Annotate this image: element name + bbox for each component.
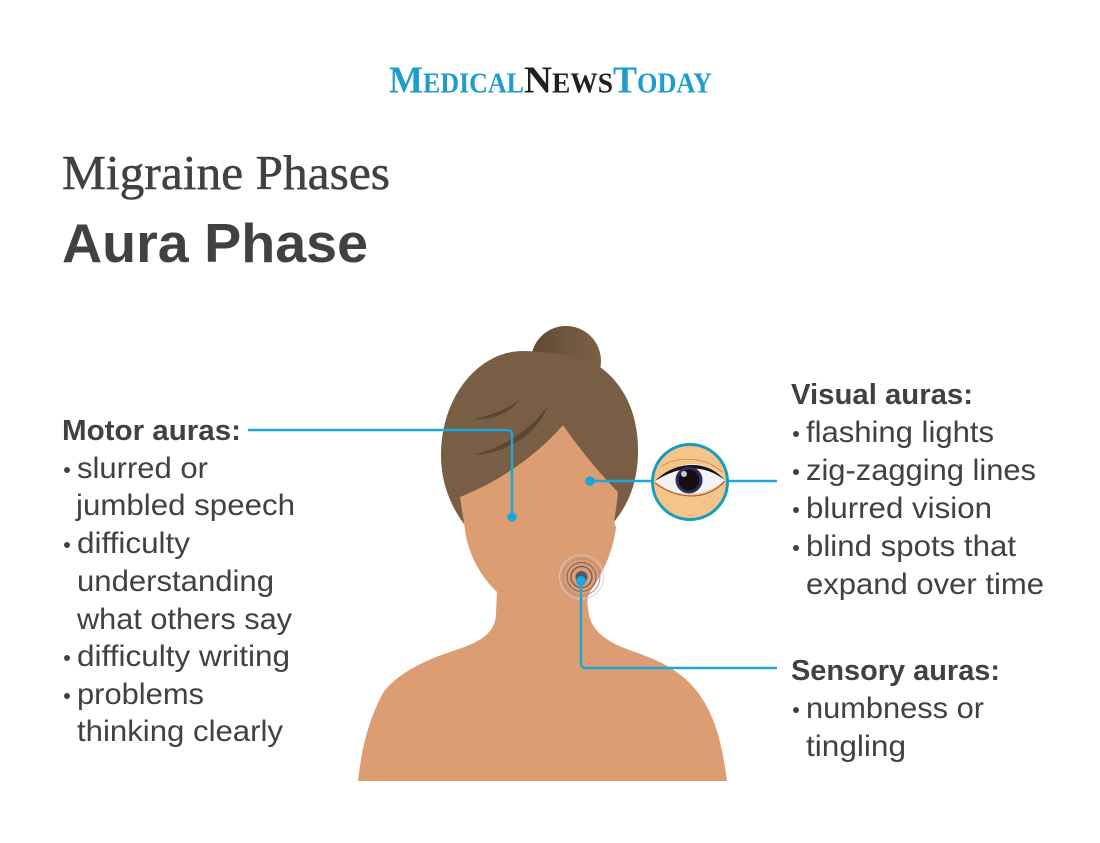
list: visual aura symptoms: zig-zagging lines [806,454,1036,487]
list: motor aura symptoms: difficulty [77,527,190,560]
list: sensory aura symptoms: numbness or [806,692,984,725]
list: motor aura symptoms: thinking clearly [77,715,283,748]
hair bun [531,326,601,396]
list: visual aura symptoms: blind spots that [806,530,1016,563]
connector: visual auras [585,476,777,486]
list: motor aura symptoms: understanding [77,565,274,598]
list: sensory aura symptoms [793,692,984,763]
logo: Medical News Today: N [524,60,552,102]
icon: eye in circle [652,444,728,520]
text block: sensory auras [791,655,1000,763]
connector: sensory auras [576,576,777,668]
logo: Medical News Today: ODAY [637,68,712,100]
hair [441,351,638,524]
text block: visual auras [791,379,1044,601]
logo: Medical News Today: EWS [552,68,613,100]
list: motor aura symptoms: what others say [76,603,292,636]
list: visual aura symptoms: flashing lights [806,416,994,449]
face, neck and shoulders [358,425,727,781]
title: Migraine Phases: Migraine Phases [62,145,390,200]
list: motor aura symptoms: problems [77,678,204,711]
connector: motor auras [248,430,517,522]
logo: Medical News Today [389,60,712,102]
list: motor aura symptoms: difficulty writing [77,640,290,673]
text block: motor auras [62,415,295,748]
sensory marker: concentric rings on neck [560,555,604,599]
list: visual aura symptoms: blurred vision [806,492,992,525]
logo: Medical News Today: M [389,60,423,102]
list: motor aura symptoms: jumbled speech [75,489,295,522]
list: motor aura symptoms: slurred or [77,452,208,485]
illustration: woman's head and shoulders [358,326,727,781]
heading: Visual auras: Visual auras: [791,379,973,411]
list: visual aura symptoms: expand over time [806,568,1044,601]
heading: Motor auras: Motor auras: [62,415,241,447]
hair strands [473,399,520,419]
list: motor aura symptoms [64,452,295,748]
logo: Medical News Today: T [613,60,637,102]
list: sensory aura symptoms: tingling [806,730,906,763]
logo: Medical News Today: EDICAL [423,68,524,100]
heading: Sensory auras: Sensory auras: [791,655,1000,687]
list: visual aura symptoms [793,416,1044,601]
heading: Aura Phase: Aura Phase [62,213,368,274]
